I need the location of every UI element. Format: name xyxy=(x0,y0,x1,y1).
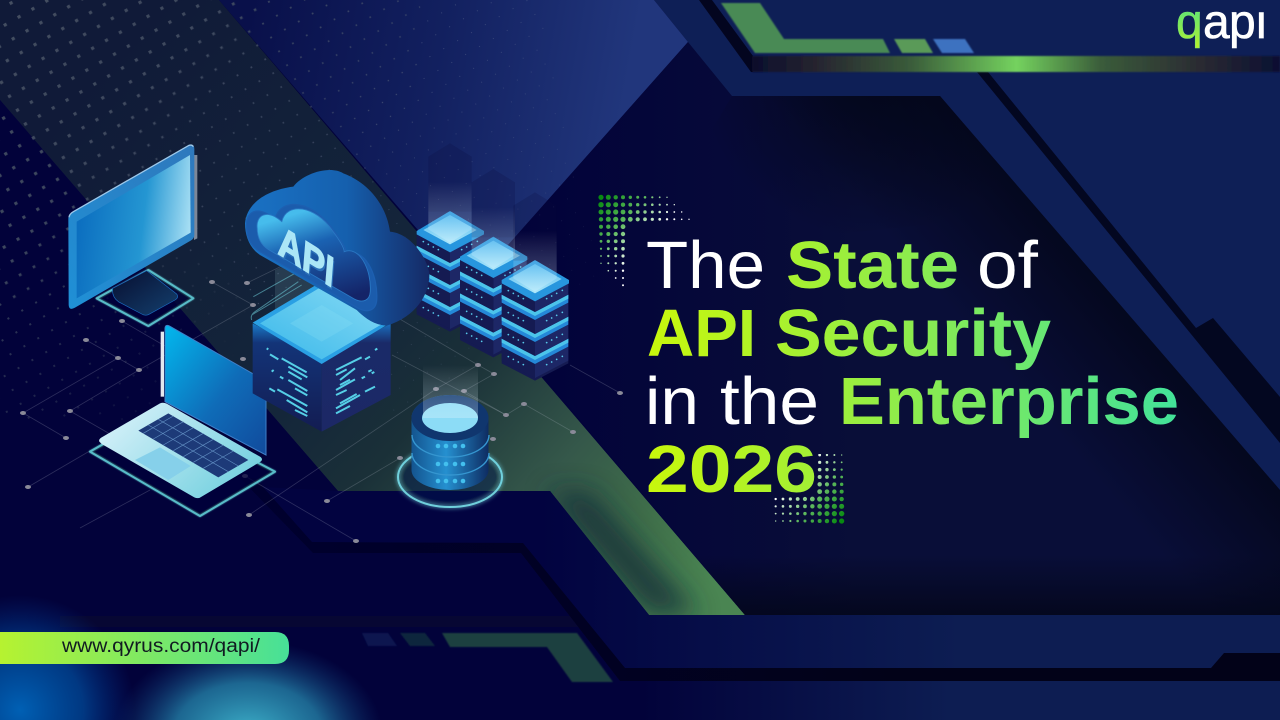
glow bar xyxy=(752,56,1280,72)
decorative tabs: top right xyxy=(721,3,974,53)
icon: API cloud: API xyxy=(278,219,337,301)
title: of xyxy=(977,228,1038,303)
background: top black stripe xyxy=(699,0,753,72)
url pill: www.qyrus.com/qapi/ xyxy=(61,636,261,657)
background: dark diagonal stripe and wedge xyxy=(977,72,1280,443)
decorative tabs: bottom xyxy=(362,633,613,682)
icon: server box with code xyxy=(251,250,391,432)
icon: server stacks xyxy=(417,143,569,381)
background: dotted texture xyxy=(0,0,600,420)
network lines and nodes xyxy=(20,262,623,543)
title: Enterprise xyxy=(839,364,1179,439)
halftone dots: bottom right of title xyxy=(774,454,844,524)
logo: qapi xyxy=(1178,12,1264,48)
glow: bottom cyan xyxy=(113,640,383,720)
background: blue triangle xyxy=(219,0,688,289)
title: Security xyxy=(775,296,1051,371)
background: dark lower stripe xyxy=(240,478,1280,681)
icon: API cloud: API xyxy=(277,215,336,297)
title: API xyxy=(647,296,756,371)
halftone dots: top left of title xyxy=(598,195,690,286)
icon: database cylinder xyxy=(398,365,502,507)
background: bottom blue panel xyxy=(300,553,1280,720)
icon: desktop monitor xyxy=(68,145,197,326)
background: faint horizontal strip xyxy=(60,616,580,627)
title: the xyxy=(720,364,819,439)
background: dark centre panel xyxy=(469,42,1280,615)
glow: bottom left blue xyxy=(0,595,135,720)
title: 2026 xyxy=(646,432,817,507)
background: diagonal green band xyxy=(0,0,745,615)
title xyxy=(645,228,1179,507)
url pill xyxy=(0,632,289,664)
icon: API cloud xyxy=(245,170,429,326)
title: State xyxy=(786,228,959,303)
icon: laptop xyxy=(90,325,275,516)
title: in xyxy=(645,364,699,439)
title: The xyxy=(646,228,765,303)
background: top right blue panel xyxy=(654,0,1280,615)
background: lower blue band xyxy=(262,487,1280,668)
